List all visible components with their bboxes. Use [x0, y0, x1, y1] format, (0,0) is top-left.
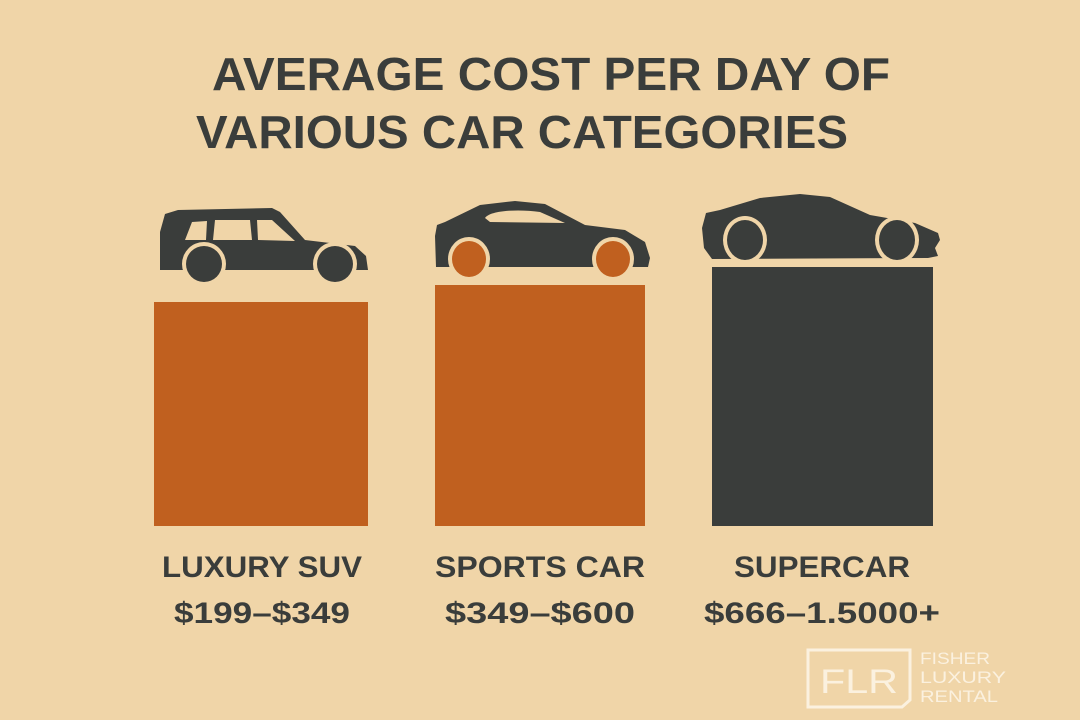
logo: RENTAL	[920, 687, 998, 706]
icon: supercar	[702, 194, 940, 264]
labels: SPORTS CAR	[435, 551, 645, 584]
bar: supercar	[712, 267, 933, 526]
title: AVERAGE COST PER DAY OF	[212, 48, 890, 100]
bar: luxury suv	[154, 302, 368, 526]
icon: sports car	[435, 201, 650, 281]
labels: SUPERCAR	[734, 551, 910, 584]
logo: FISHER	[920, 649, 990, 668]
labels: $349–$600	[445, 597, 635, 630]
bar: sports car	[435, 285, 645, 526]
icon: luxury suv	[160, 208, 368, 286]
labels: LUXURY SUV	[162, 551, 362, 584]
logo: FLR	[820, 663, 898, 701]
labels: $199–$349	[174, 597, 350, 630]
title	[196, 48, 890, 158]
logo: LUXURY	[920, 668, 1006, 687]
title: VARIOUS CAR CATEGORIES	[196, 106, 848, 158]
labels	[162, 551, 940, 630]
logo	[808, 649, 1006, 707]
labels: $666–1.5000+	[704, 597, 940, 630]
